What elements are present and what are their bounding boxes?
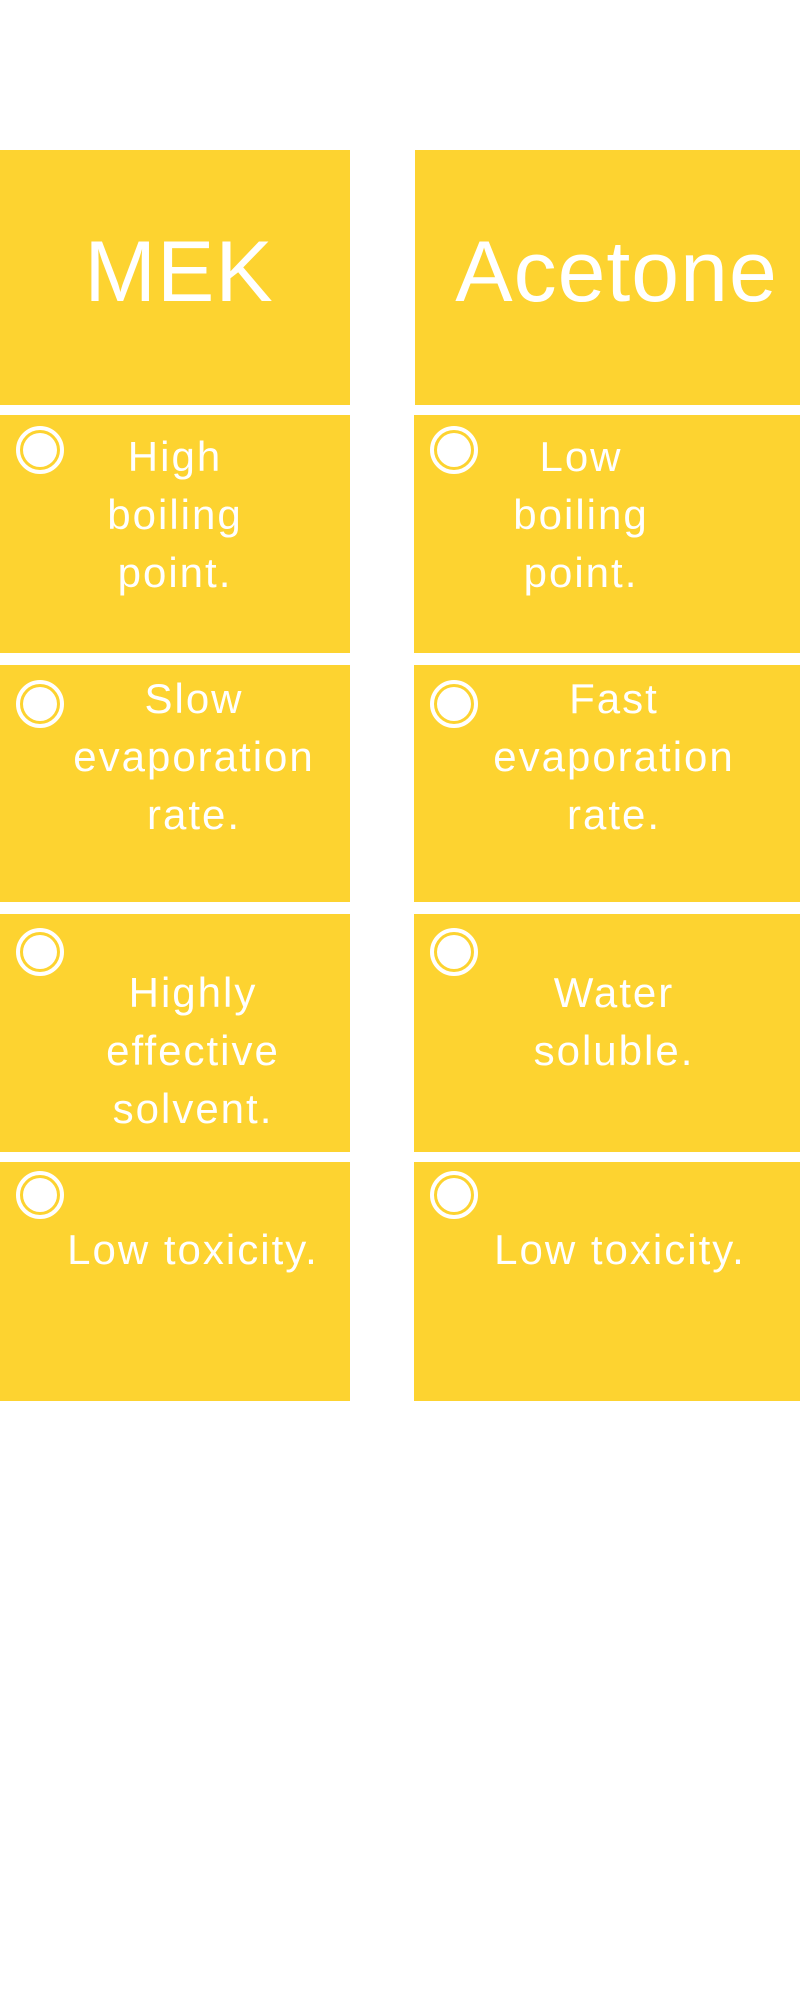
header: MEK: MEK <box>84 224 274 320</box>
text: Acetone fast evaporation: evaporation <box>493 733 735 780</box>
text: MEK high boiling point <box>107 433 243 596</box>
text: Acetone low boiling point <box>513 433 649 596</box>
text: MEK highly effective solvent: Highly <box>129 969 257 1016</box>
text: MEK low toxicity: Low toxicity. <box>67 1226 319 1273</box>
text: Acetone water soluble <box>534 969 694 1074</box>
text: Acetone low boiling point: point. <box>524 549 638 596</box>
header: MEK <box>0 150 350 405</box>
icon: circle Acetone 1 <box>430 426 478 474</box>
text: MEK highly effective solvent <box>106 969 280 1132</box>
panel: Acetone row 3 <box>414 914 800 1152</box>
icon: circle MEK 4 <box>16 1171 64 1219</box>
text: MEK highly effective solvent: solvent. <box>113 1085 273 1132</box>
text: MEK slow evaporation: evaporation <box>73 733 315 780</box>
text: Acetone water soluble: soluble. <box>534 1027 694 1074</box>
panel: MEK row 1 <box>0 415 350 653</box>
icon: circle MEK 3 <box>16 928 64 976</box>
header: Acetone <box>415 150 800 405</box>
text: Acetone fast evaporation: Fast <box>569 675 659 722</box>
icon: circle MEK 1 <box>16 426 64 474</box>
text: Acetone low boiling point: Low <box>539 433 623 480</box>
icon: circle Acetone 4 <box>430 1171 478 1219</box>
text: Acetone fast evaporation: rate. <box>567 791 661 838</box>
icon: circle Acetone 3 <box>430 928 478 976</box>
text: Acetone low toxicity: Low toxicity. <box>494 1226 746 1273</box>
text: MEK high boiling point: boiling <box>107 491 243 538</box>
panel: Acetone row 1 <box>414 415 800 653</box>
panel: MEK row 2 <box>0 665 350 902</box>
text: MEK slow evaporation: Slow <box>144 675 244 722</box>
text: Acetone low boiling point: boiling <box>513 491 649 538</box>
text: MEK high boiling point: High <box>128 433 222 480</box>
text: MEK slow evaporation: rate. <box>147 791 241 838</box>
icon: circle Acetone 2 <box>430 680 478 728</box>
panel: MEK row 4 <box>0 1162 350 1401</box>
panel: Acetone row 4 <box>414 1162 800 1401</box>
text: MEK high boiling point: point. <box>118 549 232 596</box>
text: Acetone fast evaporation <box>493 675 735 838</box>
icon: circle MEK 2 <box>16 680 64 728</box>
panel: Acetone row 2 <box>414 665 800 902</box>
text: Acetone water soluble: Water <box>554 969 674 1016</box>
text: MEK slow evaporation <box>73 675 315 838</box>
text: MEK highly effective solvent: effective <box>106 1027 280 1074</box>
panel: MEK row 3 <box>0 914 350 1152</box>
header: Acetone: Acetone <box>455 224 778 320</box>
